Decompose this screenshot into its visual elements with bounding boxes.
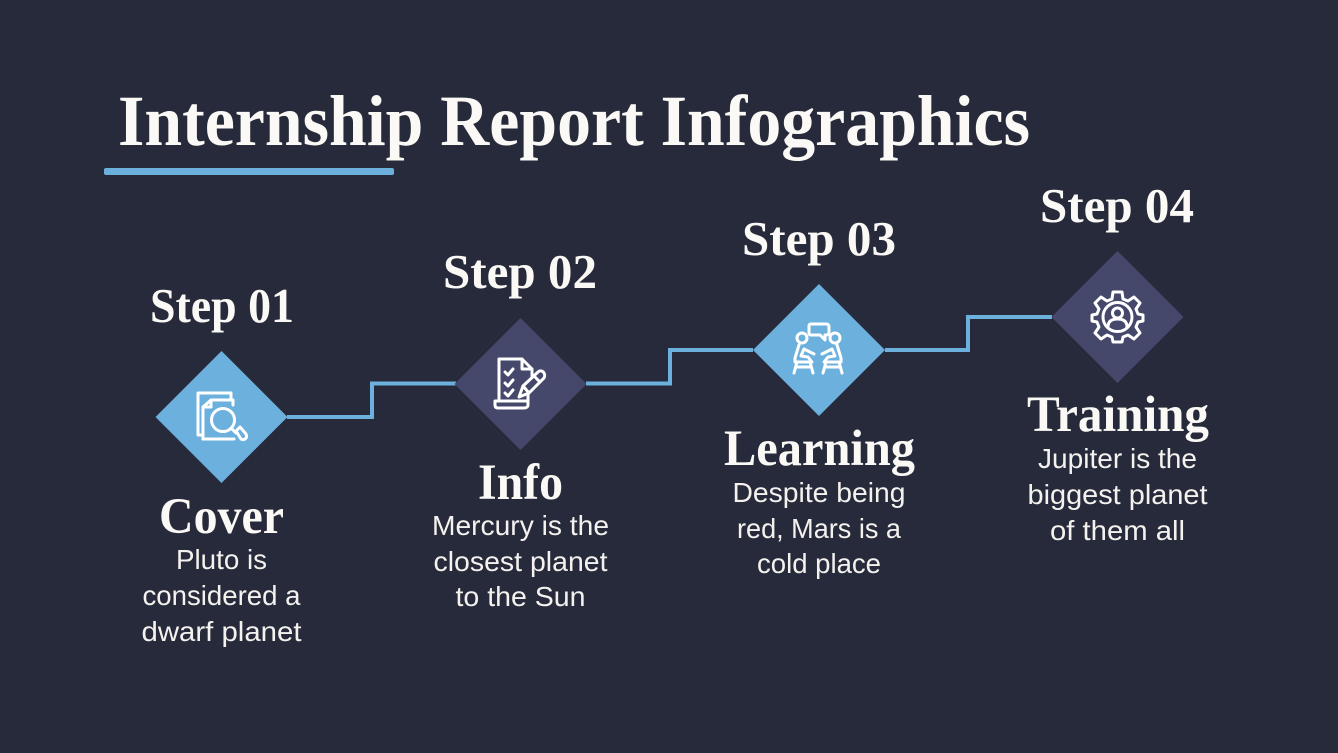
step 2 label: Step 02 [443,244,597,299]
step 3 heading: Learning [724,421,915,477]
step 3 description [732,477,906,579]
step 1 description: dwarf planet [142,616,302,647]
step 4 heading: Training [1027,387,1209,443]
step 2 [432,244,609,612]
step 2 description [432,510,609,612]
step 1 description [142,544,302,647]
connector: step 1 to step 2 [287,384,456,417]
step 2 diamond [454,318,586,450]
title: Internship Report Infographics [118,81,1030,161]
connector: step 2 to step 3 [586,350,753,384]
title underline [104,168,394,175]
step 4 description: biggest planet [1028,479,1208,510]
step 2 description: Mercury is the [432,510,609,541]
step 1 description: considered a [142,580,301,611]
step 2 description: closest planet [434,546,608,577]
step 2 description: to the Sun [456,581,586,612]
step 3 diamond [753,284,885,416]
connector: step 3 to step 4 [885,317,1052,350]
step 3 description: red, Mars is a [737,513,901,544]
step 4 diamond [1052,251,1184,383]
step 3 [724,211,915,579]
step 4 [1027,178,1209,546]
step 3 description: Despite being [732,477,906,508]
step 1 [142,278,302,647]
step 1 heading: Cover [159,489,284,545]
step 3 label: Step 03 [742,211,896,266]
step 3 description: cold place [757,548,881,579]
step 1 label: Step 01 [150,278,294,333]
step 1 description: Pluto is [176,544,267,575]
icon: two people talking [794,324,842,373]
step 1 diamond [156,351,288,483]
step 4 description: of them all [1050,515,1185,546]
step 4 label: Step 04 [1040,178,1194,233]
step 4 description [1028,443,1208,546]
step 2 heading: Info [478,455,563,511]
icon: documents with magnifier [198,393,247,440]
step 4 description: Jupiter is the [1038,443,1197,474]
icon: gear with person [1092,292,1143,342]
icon: checklist with pencil [495,359,545,408]
